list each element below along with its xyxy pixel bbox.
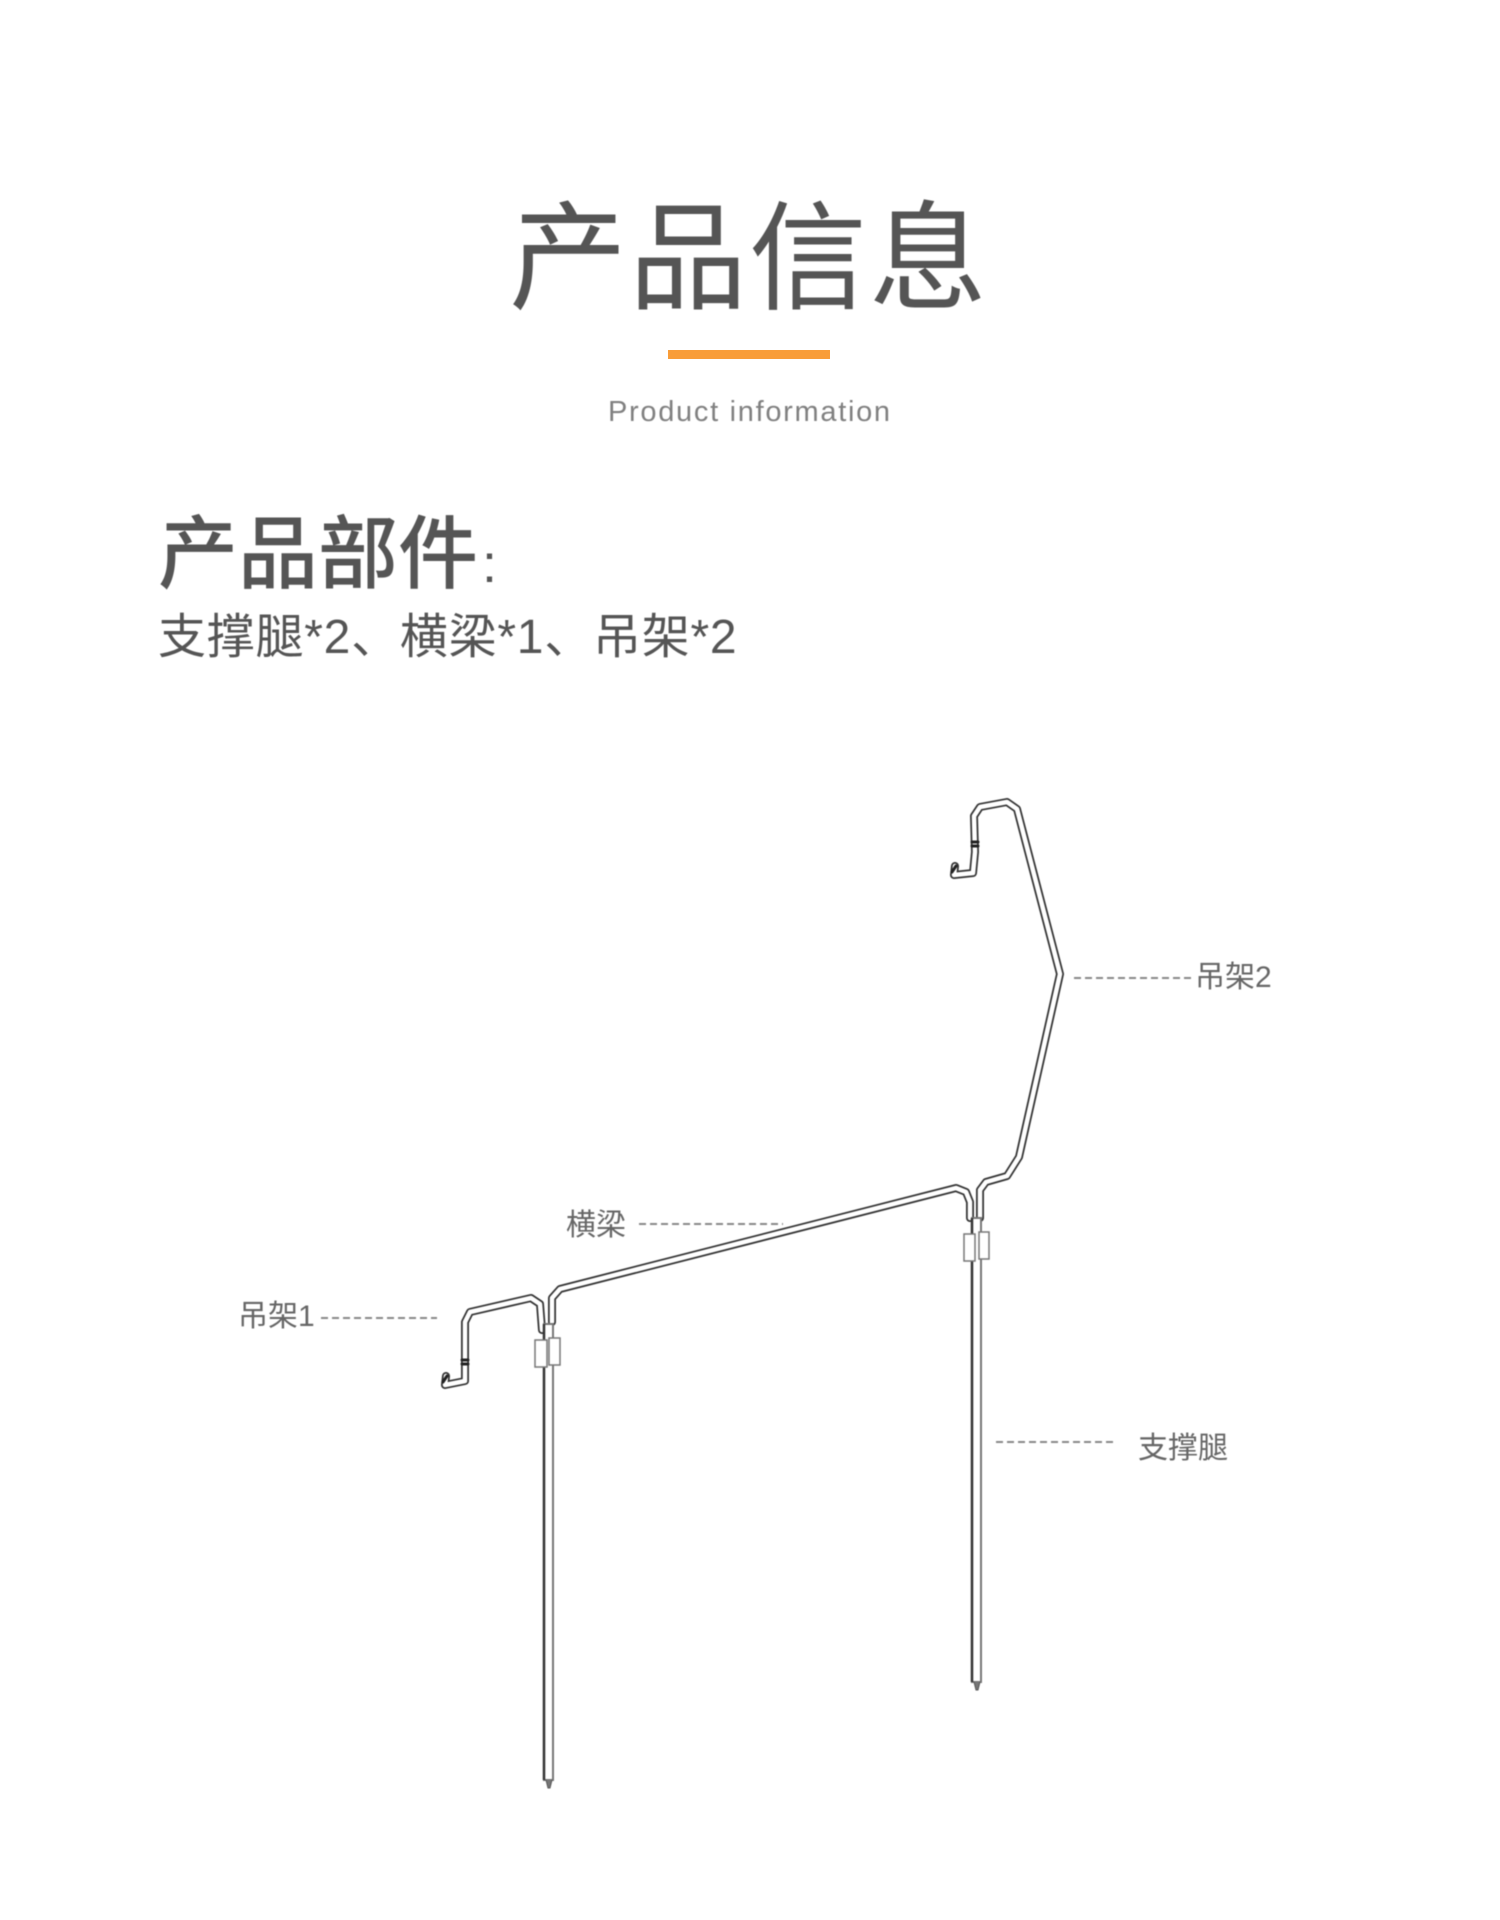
leader line: hanger 2 <box>1074 977 1192 979</box>
leader line: hanger 1 <box>321 1317 437 1319</box>
hanger 2 <box>952 802 1060 1218</box>
crossbeam <box>552 1188 970 1322</box>
leader line: support leg <box>996 1441 1115 1443</box>
label: hanger 2: 吊架2 <box>1195 961 1272 994</box>
leader line: crossbeam <box>639 1223 783 1225</box>
label: crossbeam: 横梁 <box>566 1209 626 1242</box>
label: hanger 1: 吊架1 <box>238 1300 315 1333</box>
label: support leg: 支撑腿 <box>1138 1432 1228 1465</box>
orange accent bar <box>668 350 830 359</box>
parts list: 支撑腿*2、横梁*1、吊架*2 <box>158 611 737 664</box>
hanger 1 <box>443 1298 542 1385</box>
title: 产品信息 <box>509 194 989 326</box>
subtitle: Product information <box>608 396 892 428</box>
heading: product parts: 产品部件: <box>158 510 497 599</box>
support leg right <box>964 1218 989 1690</box>
support leg left <box>535 1324 560 1788</box>
